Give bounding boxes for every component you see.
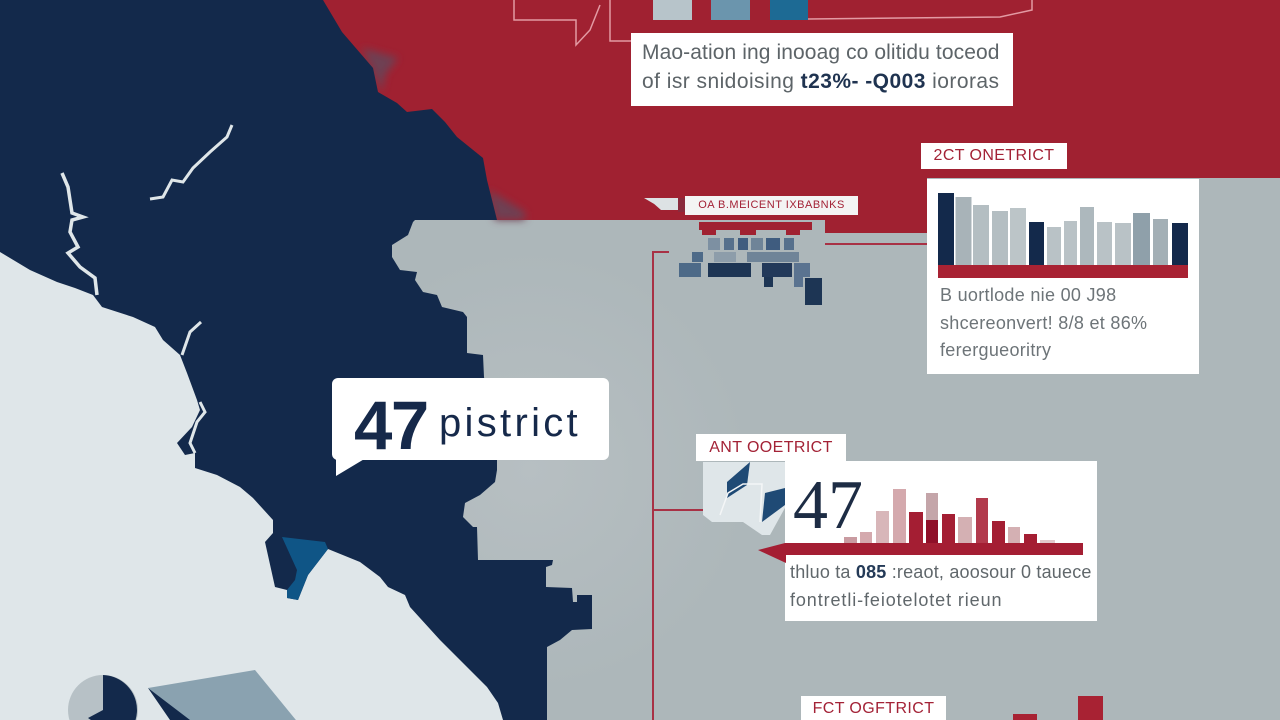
panel text [790,562,1092,610]
stat number: 47 [793,467,863,544]
bar chart: 47 [844,489,1055,543]
region: light land [0,240,510,720]
panel: 2ct district [927,179,1199,374]
callout: 47 district [332,378,609,476]
icon: map inset [703,462,785,535]
panel text: B uortlode nie 00 J98 [940,285,1116,305]
panel text: shcereonvert! 8/8 et 86% [940,312,1147,332]
pixel map cluster [679,222,822,305]
blurred border marks [362,48,525,220]
label: ant district [696,434,846,461]
callout: top note [631,33,1013,106]
stat: 47: 47 [354,387,428,464]
river: north [150,125,232,199]
river: south [182,322,201,355]
pie icon [68,675,138,720]
label: fct district: FCT OGFTRICT [813,700,934,717]
panel text: fontretli-feiotelotet rieun [790,590,1002,610]
callout: top note: Mao-ation ing inooag co olitidu toceod [642,41,1000,64]
top outline callout [514,0,1032,45]
label: 2ct district: 2CT ONETRICT [934,147,1054,164]
panel text: ferergueoritry [940,340,1051,360]
panel text [940,285,1147,360]
callout: top note: of isr snidoising t23%- -Q003 iororas [642,70,999,93]
label: small banner: OA B.MEICENT IXBABNKS [698,199,845,211]
label: 2ct district [921,143,1067,169]
river: lower [190,402,205,453]
river: west [62,173,97,295]
bar chart: bottom [1013,696,1103,720]
bar chart: 2ct [938,193,1188,278]
label: fct district [801,696,946,720]
panel: 47 district [785,461,1097,621]
connector lines [653,244,927,720]
label: small banner [644,196,858,215]
arrow: red pointer [758,543,1083,563]
folded map icon [148,670,300,720]
region: red district [300,0,1280,233]
region: navy district [0,0,592,720]
panel text: thluo ta 085 :reaot, aoosour 0 tauece [790,562,1092,582]
label: ant district: ANT OOETRICT [709,439,833,456]
text: district: pistrict [439,401,581,445]
legend swatches [653,0,808,20]
region: blue inlet [282,537,328,600]
region: grey land [400,220,1280,720]
